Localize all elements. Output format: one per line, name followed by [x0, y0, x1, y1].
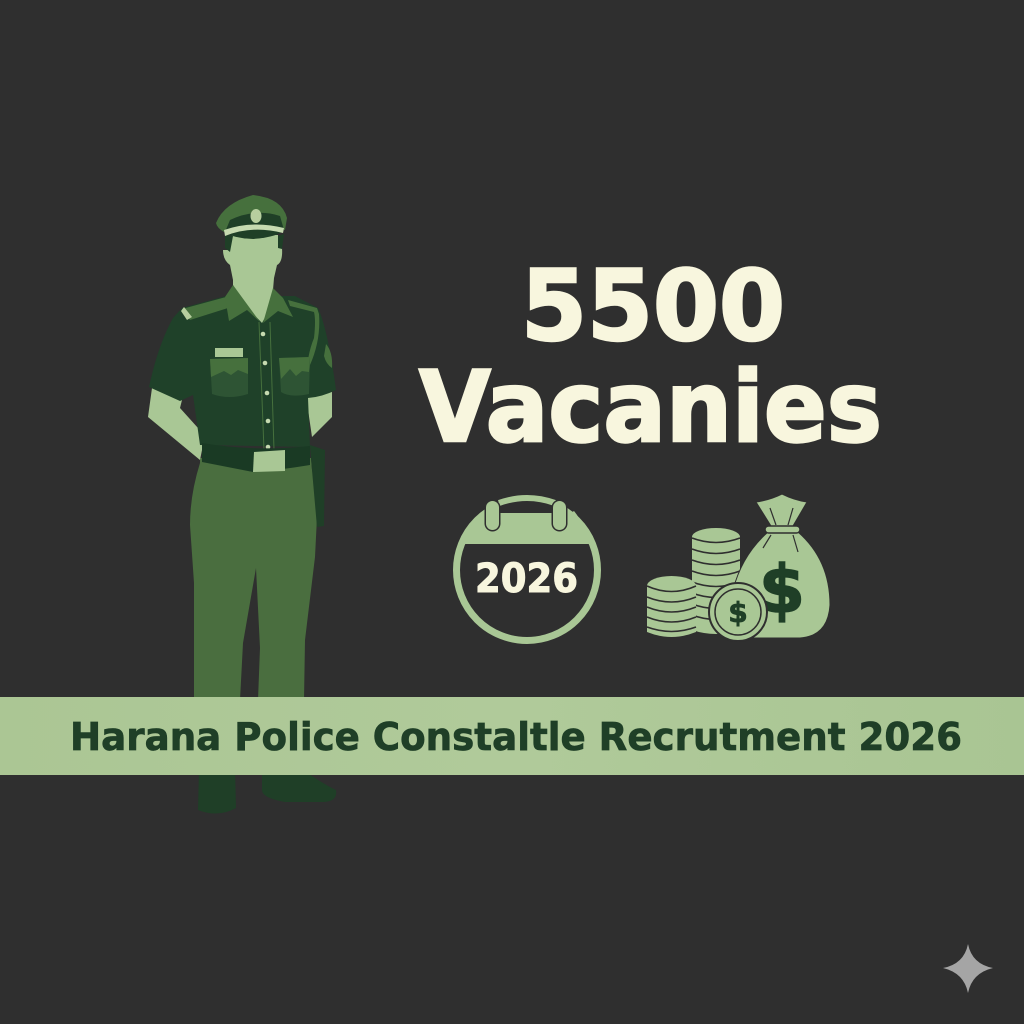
banner [0, 697, 1024, 775]
icon: calendar 2026 [456, 496, 598, 640]
shoulder cord right [288, 300, 319, 394]
heading: Vacanies: Vacanies [419, 351, 882, 465]
buttons [261, 332, 270, 449]
left pocket [210, 358, 248, 397]
tall coin stack [692, 528, 740, 634]
shoulder strap left [182, 297, 228, 320]
shirt [149, 296, 336, 447]
front coin [709, 583, 767, 641]
icon: coins and money bag [647, 494, 830, 641]
name badge [215, 348, 243, 357]
belt [202, 443, 310, 472]
head and neck [223, 235, 282, 323]
belt buckle [253, 450, 285, 472]
trousers [190, 458, 317, 700]
front coin: $ [728, 596, 748, 629]
holster [310, 445, 325, 527]
right pocket [279, 357, 310, 396]
placket lines [259, 322, 274, 450]
icon: sparkle watermark [943, 944, 993, 993]
collar [225, 285, 293, 323]
cap [216, 195, 287, 239]
banner text: Harana Police Constaltle Recrutment 2026 [70, 715, 962, 759]
short coin stack [647, 576, 696, 637]
police officer figure [148, 195, 336, 814]
hair [225, 234, 284, 252]
calendar year: 2026 [475, 556, 578, 602]
bag dollar sign: $ [759, 551, 805, 628]
boots [198, 770, 336, 814]
shoulder strap pip [181, 307, 192, 320]
heading: 5500: 5500 [521, 250, 785, 362]
money bag [731, 494, 830, 638]
arms [148, 388, 332, 460]
sleeve badge [324, 344, 332, 368]
